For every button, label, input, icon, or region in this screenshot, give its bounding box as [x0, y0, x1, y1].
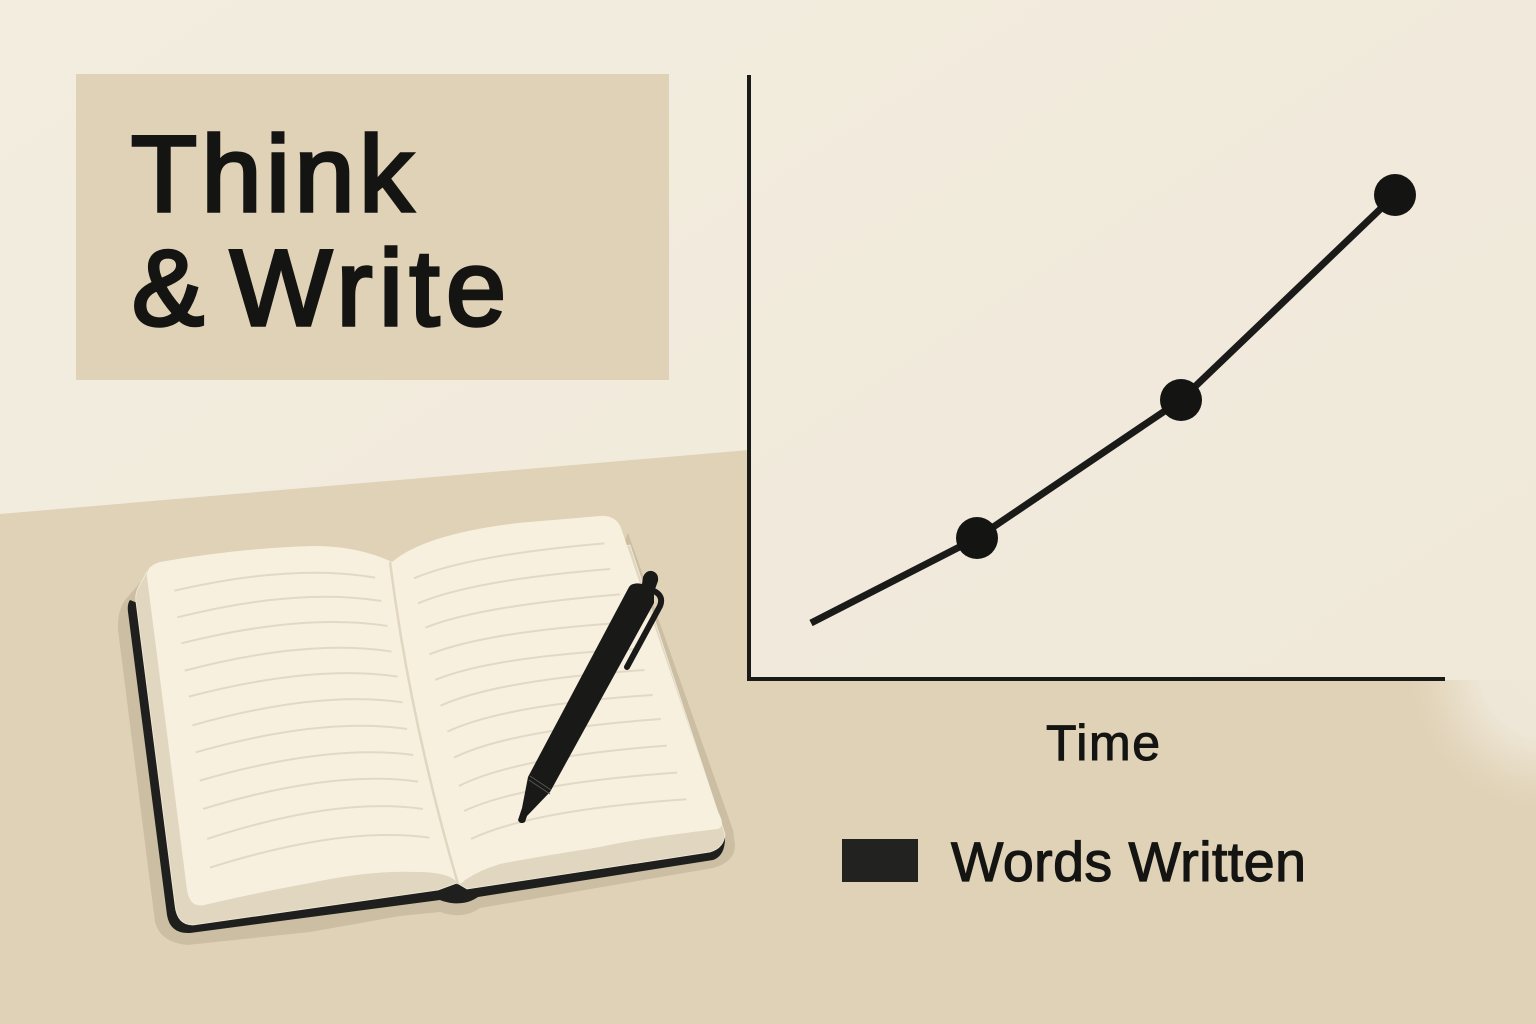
title text: &: [132, 227, 230, 348]
chart axes: [749, 75, 1445, 679]
line chart: [749, 75, 1445, 679]
legend: [842, 831, 1306, 893]
legend swatch: [842, 839, 918, 882]
pen: [518, 571, 661, 823]
title panel: [76, 74, 669, 380]
words written line: [811, 195, 1395, 623]
pen band: [529, 776, 551, 794]
title text: Write: [230, 227, 513, 348]
title text: Think: [131, 113, 418, 234]
pen clip: [627, 591, 661, 667]
data points: [956, 174, 1416, 559]
notebook shadow: [118, 533, 735, 945]
open notebook: [118, 516, 735, 945]
x axis label: Time: [1046, 715, 1162, 771]
notebook cover: [128, 600, 725, 933]
notebook spine crease: [390, 562, 458, 884]
page block: [136, 545, 725, 925]
desk surface: [0, 450, 1536, 1024]
legend label: Words Written: [951, 831, 1306, 893]
pen body: [518, 571, 658, 823]
notebook pages: [147, 516, 722, 905]
page rules: [174, 543, 687, 868]
